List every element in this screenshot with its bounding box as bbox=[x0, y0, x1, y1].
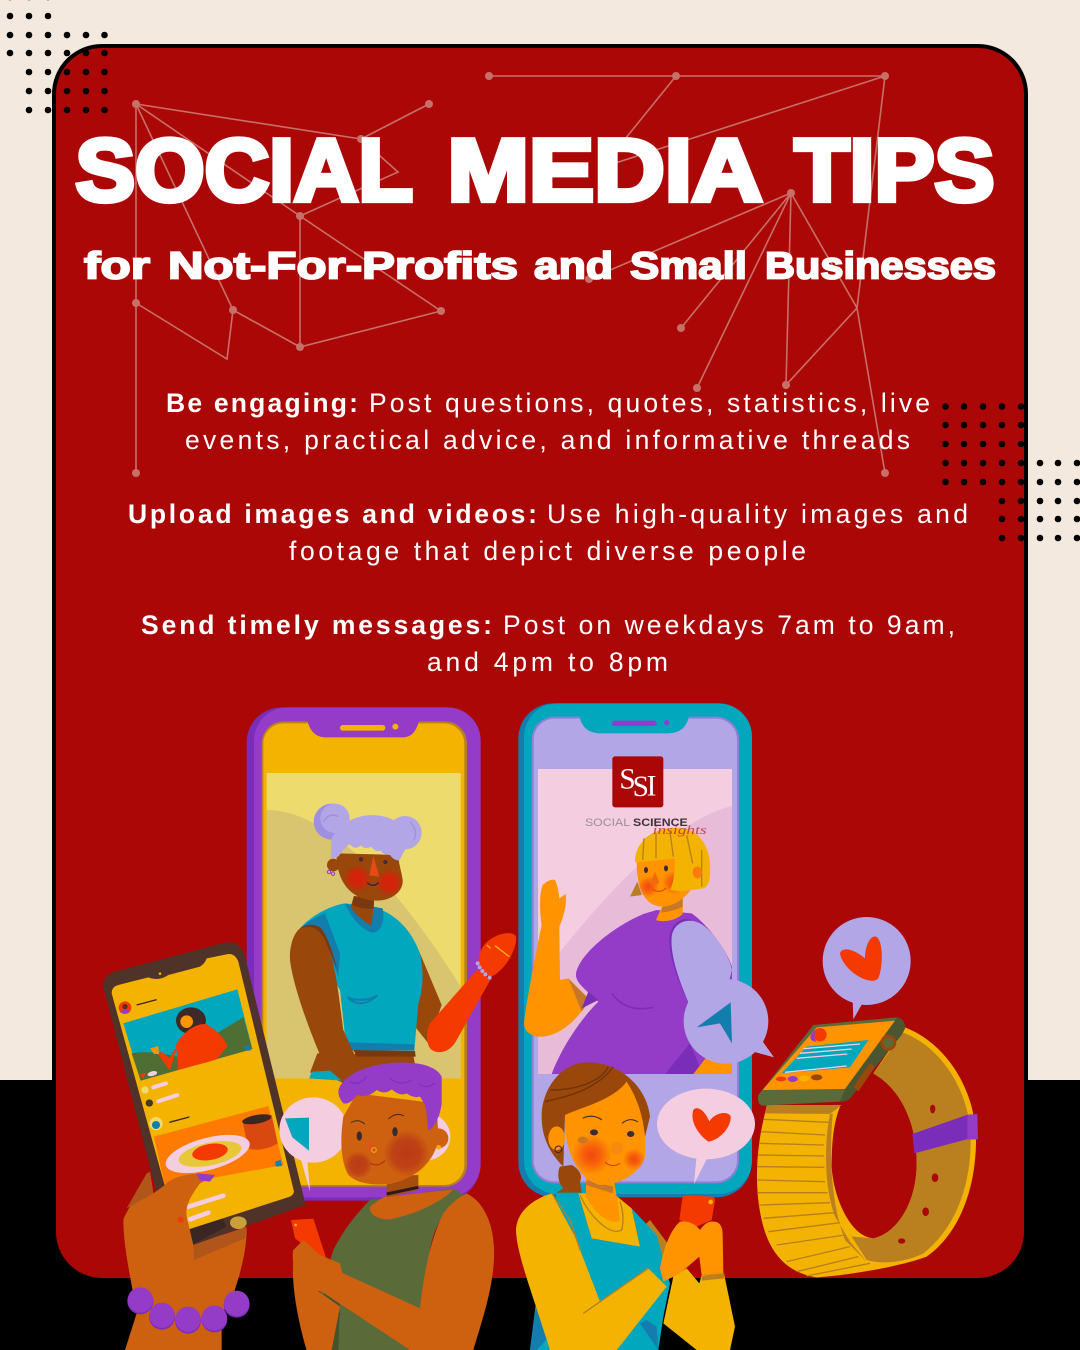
body: right arm and shoulder bbox=[320, 1193, 494, 1350]
hand behind tablet bbox=[125, 1228, 247, 1350]
woman: purple dress bbox=[552, 910, 732, 1074]
red phone bbox=[291, 1219, 326, 1257]
logo: SSI: SSI bbox=[619, 764, 656, 803]
yellow back arm bbox=[663, 1268, 735, 1350]
hands bbox=[293, 1240, 343, 1293]
woman: neck bbox=[656, 897, 683, 921]
head bbox=[428, 1128, 448, 1148]
tip: upload images and videos: Use high-quality images and bbox=[547, 499, 968, 529]
logo script: insights: insights bbox=[653, 823, 707, 837]
dot pattern: right side bbox=[942, 403, 1080, 541]
overalls bbox=[530, 1193, 670, 1350]
red phone bbox=[679, 1195, 715, 1227]
woman: teal sweater vest bbox=[300, 903, 423, 1051]
subtitle: and bbox=[534, 246, 613, 288]
tip: send timely messages: Send timely messages: bbox=[141, 610, 492, 640]
hand front bbox=[123, 1172, 215, 1313]
tip: upload images and videos: footage that depict diverse people bbox=[289, 536, 806, 566]
illustration: smartwatch with heart bubble bbox=[757, 917, 978, 1277]
illustration: person with purple hair and red phone bbox=[279, 1063, 494, 1350]
title: SOCIAL bbox=[76, 120, 413, 220]
woman: head and yellow hair bbox=[630, 882, 642, 897]
woman: near arm bbox=[290, 926, 361, 1084]
title: MEDIA bbox=[448, 120, 762, 220]
illustration: teal phone with logo and woman bbox=[518, 703, 774, 1197]
tip: be engaging: Post questions, quotes, statistics, live bbox=[369, 388, 930, 418]
watch face bbox=[758, 1017, 905, 1106]
tip: send timely messages: and 4pm to 8pm bbox=[427, 647, 668, 677]
tip: send timely messages: Post on weekdays 7am to 9am, bbox=[503, 610, 955, 640]
title bbox=[76, 120, 994, 220]
hands bbox=[660, 1221, 723, 1282]
tip: be engaging bbox=[166, 388, 930, 455]
tablet body bbox=[103, 942, 306, 1245]
illustration: purple phone with woman bbox=[247, 707, 516, 1201]
brown hair and braid bbox=[557, 1165, 582, 1193]
subtitle: Not-For-Profits bbox=[168, 246, 518, 288]
purple hair bbox=[338, 1063, 442, 1131]
heart bubble bbox=[823, 917, 911, 1019]
pink heart bubble bbox=[657, 1089, 755, 1184]
watch band bbox=[757, 1027, 976, 1277]
network constellation lines bbox=[132, 72, 889, 477]
illustration: tablet held in hand bbox=[103, 942, 306, 1350]
woman: head bbox=[327, 859, 340, 871]
dot pattern: top left bbox=[7, 0, 108, 113]
tip: upload images and videos bbox=[128, 499, 968, 566]
post 1: avatar and image bbox=[119, 1001, 131, 1014]
woman: raised red arm bbox=[427, 969, 491, 1052]
logo: SSI: SOCIAL SCIENCE bbox=[585, 817, 688, 829]
subtitle bbox=[84, 246, 996, 288]
woman: raised arm bbox=[524, 880, 583, 1037]
neck and choker bbox=[387, 1175, 418, 1197]
tip: be engaging: events, practical advice, and informative threads bbox=[185, 425, 910, 455]
tip: send timely messages bbox=[141, 610, 955, 677]
subtitle: Businesses bbox=[765, 246, 996, 288]
yellow near sleeve bbox=[516, 1193, 667, 1350]
logo: SSI bbox=[585, 756, 688, 829]
body: green top bbox=[320, 1188, 477, 1350]
title: TIPS bbox=[794, 120, 994, 220]
tip: upload images and videos: Upload images and videos: bbox=[128, 499, 537, 529]
yellow chest and neck bbox=[578, 1193, 640, 1247]
post 2: avatar and pasta image bbox=[149, 1117, 163, 1130]
woman: waist bbox=[310, 1053, 417, 1078]
comment chips bbox=[188, 1196, 223, 1207]
woman: lavender hair and buns bbox=[314, 804, 350, 840]
subtitle: for bbox=[84, 246, 150, 288]
comments bbox=[141, 1086, 149, 1094]
woman: lavender sleeve bbox=[669, 919, 692, 1010]
woman: back arm bbox=[415, 953, 442, 1043]
woman: neck bbox=[351, 896, 374, 926]
pink bubble with teal arrow bbox=[279, 1097, 450, 1192]
subtitle: Small bbox=[630, 246, 747, 288]
body: left arm bbox=[293, 1257, 340, 1350]
send bubble bbox=[684, 979, 774, 1064]
purple bead bracelet bbox=[127, 1287, 250, 1334]
watch strap loop bbox=[912, 1114, 977, 1153]
head bbox=[565, 1082, 645, 1185]
illustration: person with braid and overalls bbox=[516, 1062, 755, 1350]
tip: be engaging: Be engaging: bbox=[166, 388, 358, 418]
